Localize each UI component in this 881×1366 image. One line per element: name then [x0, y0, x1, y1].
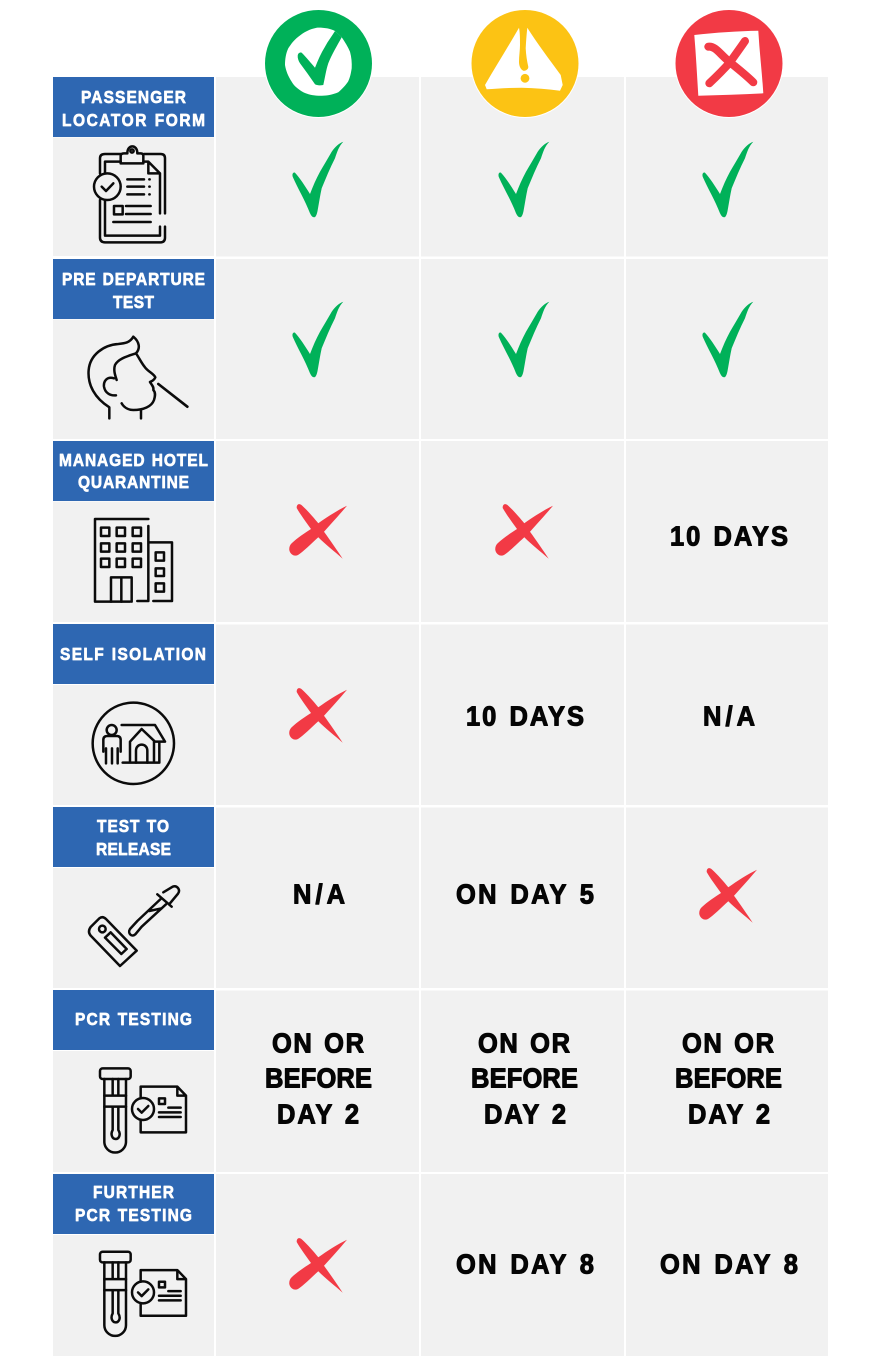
- value: on or before day 2, column one: [265, 1027, 372, 1130]
- heading: passenger locator form: [53, 77, 214, 137]
- icon: nasal swab on face profile: [89, 337, 187, 418]
- row: further pcr testing: [53, 1174, 798, 1336]
- value: on or before day 2, column two: [471, 1027, 578, 1130]
- heading: test to release: [53, 807, 214, 867]
- value: on day 8: ON DAY 8: [660, 1248, 798, 1280]
- heading: managed hotel quarantine: QUARANTINE: [78, 473, 189, 492]
- icon: test tube and result form: [100, 1068, 186, 1152]
- row: test to release: [53, 807, 757, 966]
- value: not applicable: N/A: [293, 878, 345, 910]
- icon: test tube and result form: [100, 1252, 186, 1336]
- value: on or before day 2, column two: ON OR: [478, 1027, 570, 1059]
- value: on day 8: ON DAY 8: [456, 1248, 594, 1280]
- value: on or before day 2, column one: ON OR: [272, 1027, 364, 1059]
- heading: pre departure test: PRE DEPARTURE: [62, 270, 205, 289]
- heading: managed hotel quarantine: MANAGED HOTEL: [59, 451, 208, 470]
- value: on or before day 2, column two: BEFORE: [471, 1062, 578, 1094]
- value: 10 days: 10 DAYS: [466, 700, 584, 732]
- value: on day 5: ON DAY 5: [456, 878, 594, 910]
- tick: all three columns: [292, 302, 753, 377]
- icon: hotel buildings: [95, 519, 172, 602]
- row: pcr testing: [53, 990, 782, 1152]
- heading: test to release: RELEASE: [96, 840, 171, 859]
- heading: further pcr testing: [53, 1174, 214, 1234]
- value: on or before day 2, column one: BEFORE: [265, 1062, 372, 1094]
- heading: self isolation: SELF ISOLATION: [60, 645, 206, 664]
- icon: green tick status: [264, 9, 373, 118]
- heading: pre departure test: [53, 259, 214, 319]
- cross: first two columns: [289, 504, 553, 559]
- row: pre departure test: [53, 259, 753, 418]
- icon: person and house in circle: [93, 703, 174, 784]
- icon: clipboard form: [94, 146, 165, 242]
- value: on or before day 2, column three: ON OR: [682, 1027, 774, 1059]
- heading: pcr testing: PCR TESTING: [75, 1010, 192, 1029]
- heading: self isolation: [53, 624, 214, 684]
- heading: managed hotel quarantine: [53, 441, 214, 501]
- heading: further pcr testing: FURTHER: [93, 1183, 174, 1202]
- heading: passenger locator form: PASSENGER: [81, 88, 186, 107]
- cross: first column: [289, 688, 347, 743]
- cross: third column: [699, 868, 757, 923]
- row: passenger locator form: [53, 77, 753, 242]
- value: on or before day 2, column two: DAY 2: [484, 1098, 566, 1130]
- row: managed hotel quarantine: [53, 441, 788, 602]
- value: on or before day 2, column three: BEFORE: [675, 1062, 782, 1094]
- value: 10 days: 10 DAYS: [670, 520, 788, 552]
- value: not applicable: N/A: [703, 700, 755, 732]
- value: on or before day 2, column one: DAY 2: [277, 1098, 359, 1130]
- icon: red cross status: [674, 9, 784, 118]
- tick: all three columns: [292, 142, 753, 217]
- heading: pcr testing: [53, 990, 214, 1050]
- heading: passenger locator form: LOCATOR FORM: [62, 111, 205, 130]
- cross: first column: [289, 1238, 347, 1293]
- value: on or before day 2, column three: [675, 1027, 782, 1130]
- icon: test cassette and dropper: [89, 886, 179, 966]
- heading: pre departure test: TEST: [113, 293, 154, 312]
- row: self isolation: [53, 624, 755, 784]
- heading: test to release: TEST TO: [97, 817, 169, 836]
- value: on or before day 2, column three: DAY 2: [688, 1098, 770, 1130]
- icon: amber warning status: [470, 9, 580, 118]
- heading: further pcr testing: PCR TESTING: [75, 1206, 192, 1225]
